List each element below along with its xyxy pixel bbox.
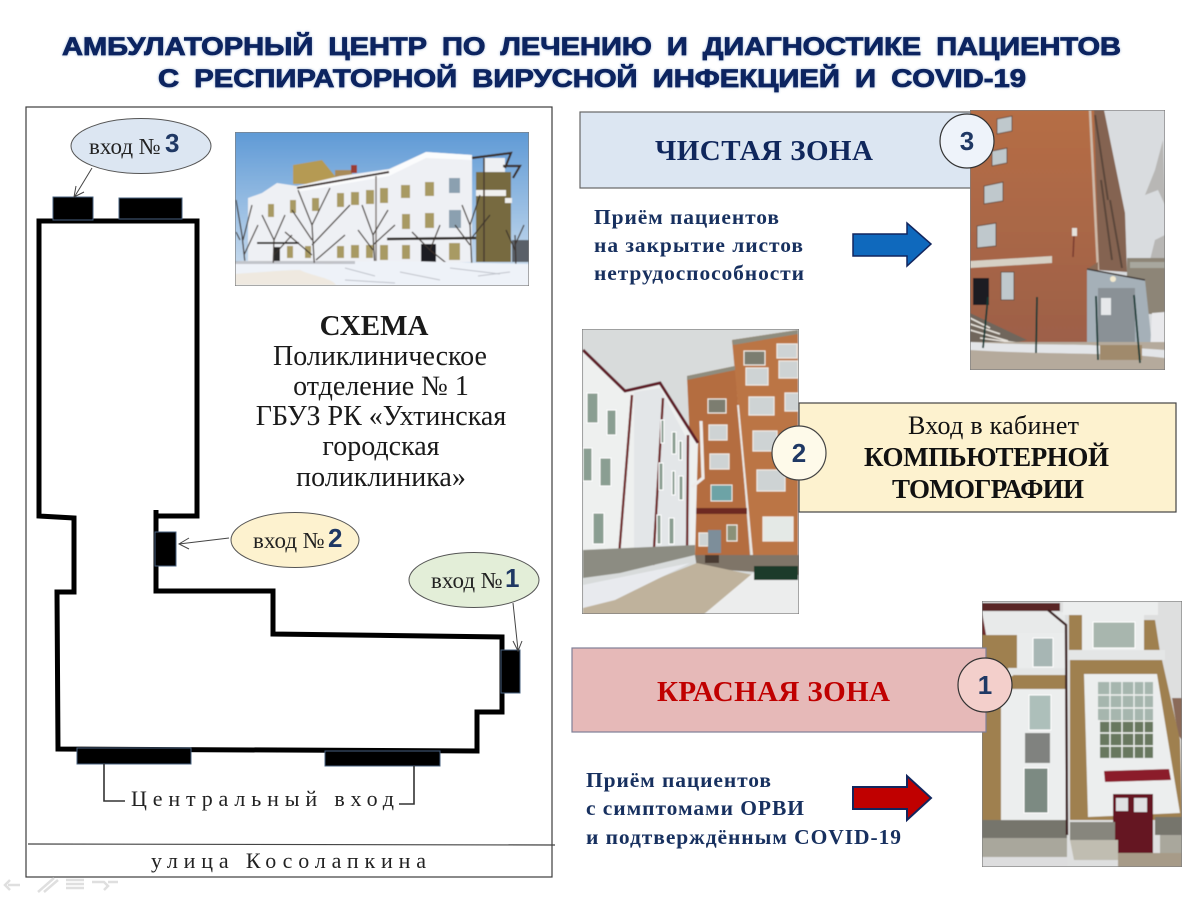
- badge 1: [958, 658, 1012, 712]
- callout: entrance 1: [409, 552, 539, 651]
- street line: [28, 844, 555, 845]
- clean zone heading: ЧИСТАЯ ЗОНА: [655, 135, 873, 167]
- clean zone description: [594, 205, 804, 285]
- badge 1: 1: [978, 670, 992, 700]
- callout: entrance 3: 3: [165, 128, 179, 158]
- wall stub at entrance 2: [154, 510, 158, 516]
- scheme caption: городская: [322, 431, 440, 462]
- panel: CT room: [582, 329, 1176, 615]
- building outline: [39, 221, 502, 751]
- central door left: [77, 748, 191, 764]
- arrow: red: [853, 776, 931, 820]
- callout: entrance 1: вход №: [431, 568, 503, 593]
- central door right: [325, 751, 440, 766]
- entrance 3 door: [53, 197, 93, 220]
- scheme caption: ГБУЗ РК «Ухтинская: [256, 401, 506, 432]
- CT room text: ТОМОГРАФИИ: [892, 474, 1084, 504]
- title: АМБУЛАТОРНЫЙ ЦЕНТР ПО ЛЕЧЕНИЮ И ДИАГНОСТИКЕ ПАЦИЕНТОВ: [62, 31, 1121, 61]
- red zone description: [586, 768, 901, 849]
- CT room text: [864, 411, 1109, 504]
- photo: entrance 1 facade: [982, 601, 1182, 867]
- red zone heading: КРАСНАЯ ЗОНА: [657, 676, 890, 708]
- panel: red zone: [572, 601, 1182, 867]
- scheme caption: Поликлиническое: [273, 341, 487, 372]
- callout: entrance 2: 2: [328, 523, 342, 553]
- CT room banner: [799, 403, 1176, 512]
- red zone banner: [572, 648, 986, 732]
- red zone description: и подтверждённым COVID-19: [586, 825, 901, 849]
- central entrance label: Центральный вход: [131, 786, 394, 811]
- red zone description: Приём пациентов: [586, 768, 771, 792]
- upper door: [119, 198, 182, 219]
- faint slideshow controls: [5, 878, 118, 892]
- panel: building scheme: [26, 107, 555, 877]
- scheme caption: [256, 310, 506, 493]
- scheme caption: поликлиника»: [296, 462, 466, 493]
- title: [62, 31, 1121, 93]
- clean zone description: на закрытие листов: [594, 233, 803, 257]
- entrance 1 door: [501, 650, 520, 693]
- clean zone description: нетрудоспособности: [594, 261, 804, 285]
- callout: entrance 3: [71, 118, 211, 197]
- photo: entrance 3 building: [970, 110, 1165, 370]
- callout: entrance 3: вход №: [89, 134, 161, 159]
- badge 2: [772, 426, 826, 480]
- badge 2: 2: [792, 438, 806, 468]
- photo: polyclinic exterior: [235, 132, 529, 286]
- badge 3: [940, 114, 994, 168]
- callout: entrance 2: [179, 512, 359, 568]
- arrow: blue: [853, 223, 931, 266]
- red zone description: с симптомами ОРВИ: [586, 796, 804, 820]
- scheme caption: СХЕМА: [320, 310, 428, 342]
- panel: clean zone: [580, 110, 1165, 370]
- photo: entrance 2 courtyard: [582, 329, 799, 615]
- title: АМБУЛАТОРНЫЙ ЦЕНТР ПО ЛЕЧЕНИЮ И ДИАГНОСТИКЕ ПАЦИЕНТОВ: [62, 31, 1121, 61]
- badge 3: 3: [960, 126, 974, 156]
- CT room text: КОМПЬЮТЕРНОЙ: [864, 442, 1109, 472]
- clean zone banner: [580, 112, 972, 188]
- clean zone description: Приём пациентов: [594, 205, 779, 229]
- title: С РЕСПИРАТОРНОЙ ВИРУСНОЙ ИНФЕКЦИЕЙ И COVID-19: [158, 63, 1026, 93]
- central entrance brackets: [104, 764, 414, 804]
- entrance 2 door: [155, 532, 176, 566]
- callout: entrance 1: 1: [505, 563, 519, 593]
- callout: entrance 2: вход №: [253, 528, 325, 553]
- scheme caption: отделение № 1: [293, 371, 469, 402]
- title: С РЕСПИРАТОРНОЙ ВИРУСНОЙ ИНФЕКЦИЕЙ И COVID-19: [158, 63, 1026, 93]
- street label: улица Косолапкина: [151, 848, 426, 873]
- scheme frame: [26, 107, 552, 877]
- CT room text: Вход в кабинет: [908, 411, 1079, 440]
